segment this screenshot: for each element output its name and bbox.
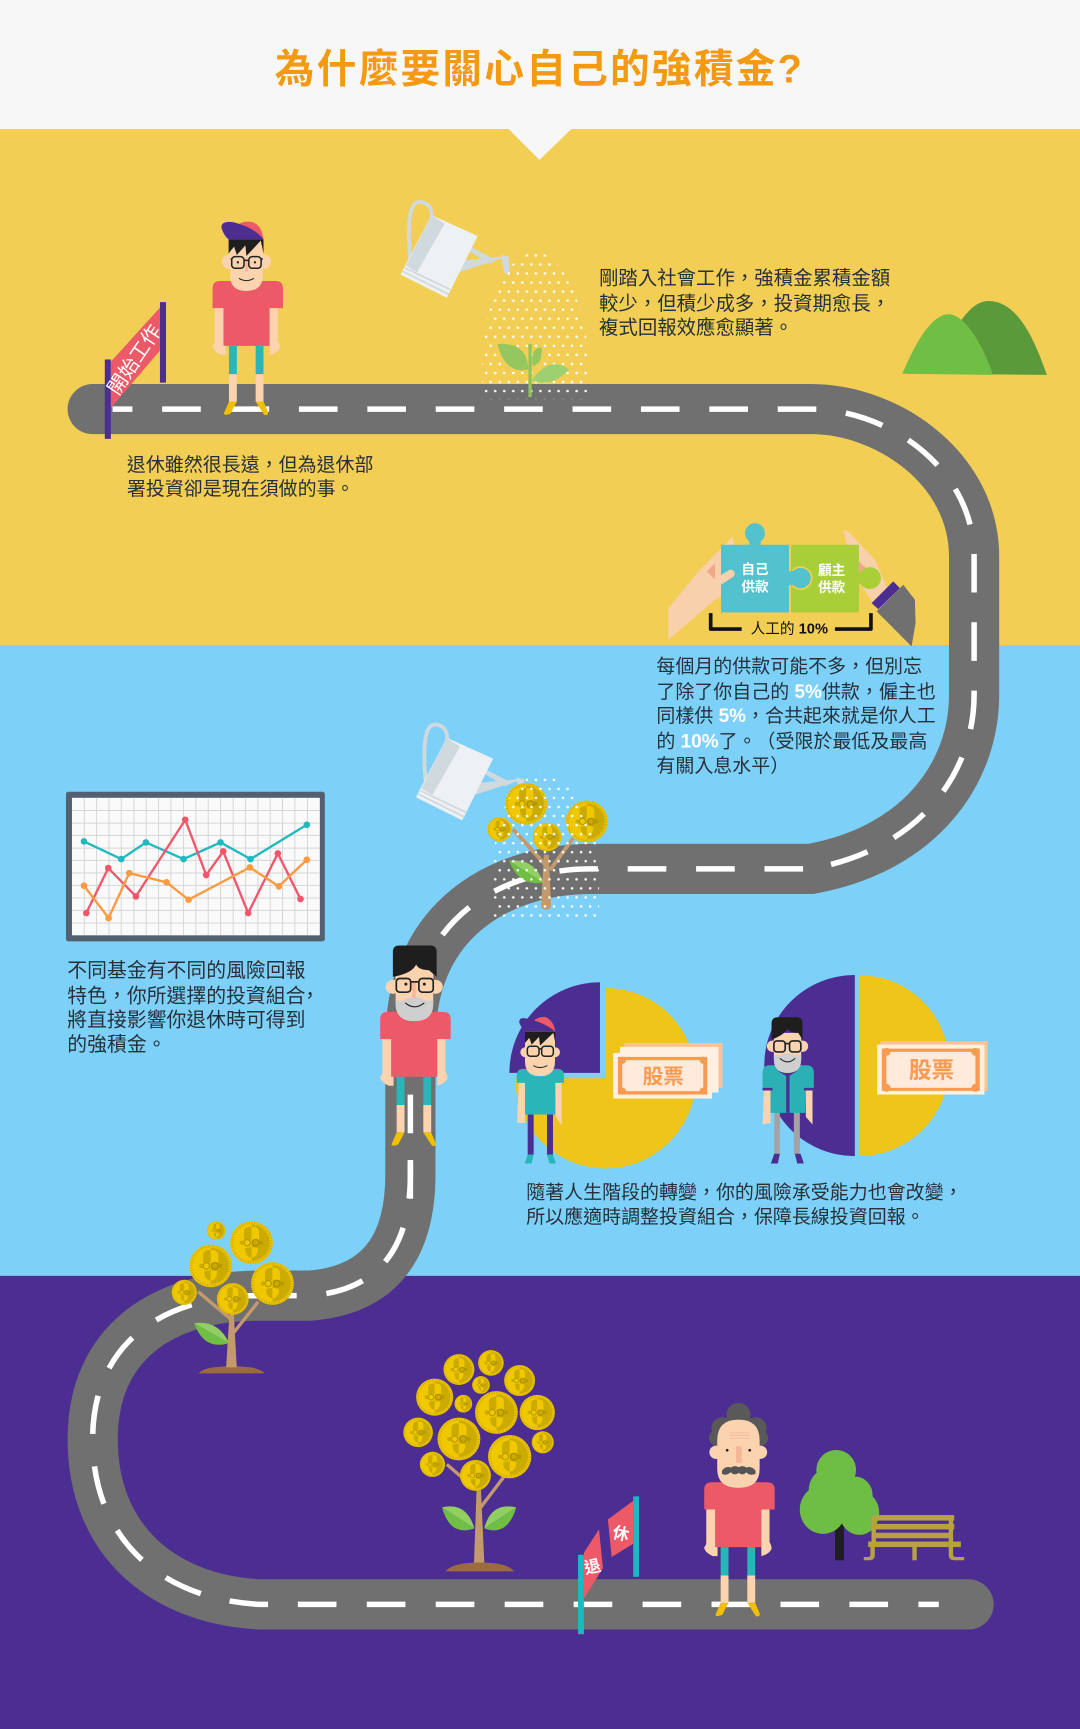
coin tree: medium [172,1221,294,1373]
title notch arrow [509,129,571,160]
stock certificates stack: 股票 [643,1066,684,1089]
character: young man in pink shirt [213,222,283,415]
paragraph: fund choice: 將直接影響你退休時可得到 [67,1010,305,1032]
stock certificate [877,1041,988,1095]
paragraph: risk tolerance changes [526,1182,963,1228]
puzzle: contribution from self and employer: 人工的 10% [751,621,828,638]
line chart on board [66,792,325,941]
park tree [800,1450,879,1560]
paragraph: contributions: 的 10%了。（受限於最低及最高 [656,731,927,753]
pie chart: older investor, half stocks [763,975,988,1163]
paragraph: risk tolerance changes: 所以應適時調整投資組合，保障長線投資回報。 [526,1205,925,1228]
puzzle: contribution from self and employer: 自己 [741,561,769,577]
paragraph: early career compounding: 複式回報效應愈顯著。 [599,316,793,339]
paragraph: start planning now: 退休雖然很長遠，但為退休部 [127,454,374,476]
puzzle: contribution from self and employer [668,523,916,646]
watering can 2 [416,724,525,820]
park bench [864,1515,964,1560]
paragraph: contributions [656,656,936,777]
character: retired old man [704,1403,775,1616]
coin tree: full grown [403,1350,555,1571]
paragraph: fund choice: 不同基金有不同的風險回報 [67,960,306,982]
paragraph: contributions: 每個月的供款可能不多，但別忘 [656,656,922,678]
pie chart: young investor, mostly stocks [509,982,723,1168]
paragraph: fund choice: 的強積金。 [67,1034,167,1056]
retirement flags: 退休: 退 [583,1556,603,1578]
purple section background [0,1276,1080,1729]
title band background [0,0,1080,129]
paragraph: fund choice [67,960,320,1056]
title: 為什麼要關心自己的強積金? [275,48,804,92]
water droplets 2 [493,772,599,917]
start flag: 開始工作 [104,302,166,439]
blue section background [0,645,1080,1276]
watering can 1 [400,202,510,298]
character: middle-aged man with beard [380,946,451,1146]
retirement flags: 退休 [578,1496,639,1634]
green hills [902,301,1047,375]
older man small figure [763,1017,814,1163]
paragraph: start planning now: 署投資卻是現在須做的事。 [127,478,355,500]
paragraph: early career compounding [599,267,890,339]
stock certificate: 股票 [909,1058,954,1083]
water droplets 1 [482,251,588,399]
yellow section background [0,129,1080,645]
stock certificates stack [613,1043,723,1099]
coin sapling on road [488,783,608,910]
puzzle: contribution from self and employer: 供款 [818,580,846,595]
paragraph: contributions: 有關入息水平） [656,755,789,777]
start flag: 開始工作: 開始工作 [104,321,166,399]
paragraph: early career compounding: 剛踏入社會工作，強積金累積金額 [599,267,890,289]
winding road [93,409,974,1604]
retirement flags: 退休: 休 [611,1523,631,1545]
paragraph: risk tolerance changes: 隨著人生階段的轉變，你的風險承受能力也會改變， [526,1182,963,1204]
young man small figure [517,1017,564,1163]
paragraph: early career compounding: 較少，但積少成多，投資期愈長， [599,293,890,315]
puzzle: contribution from self and employer: 供款 [741,579,769,594]
paragraph: contributions: 了除了你自己的 5%供款，僱主也 [656,681,936,703]
sprout [498,344,569,397]
puzzle: contribution from self and employer: 顧主 [818,562,845,578]
paragraph: start planning now [127,454,374,500]
paragraph: contributions: 同樣供 5%，合共起來就是你人工 [656,705,936,727]
paragraph: fund choice: 特色，你所選擇的投資組合， [67,985,320,1007]
